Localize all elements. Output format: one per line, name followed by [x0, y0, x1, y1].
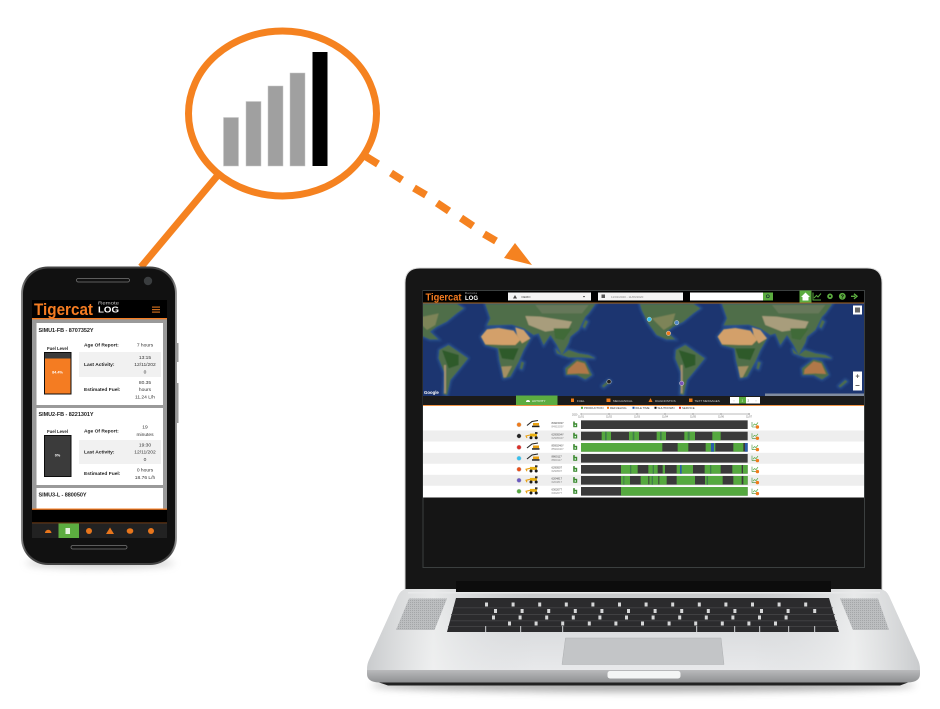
chart legend: PRODUCTION [584, 406, 603, 410]
world map [403, 303, 864, 396]
time axis: 11/04 [662, 416, 669, 418]
machine list [517, 420, 759, 495]
pagination: 2 [748, 398, 750, 402]
machine list: 6302077 [552, 491, 562, 495]
machine list: 6204817 [552, 477, 562, 481]
machine list: 6290504Y [552, 436, 564, 440]
world map: Google [424, 390, 439, 395]
laptop [367, 268, 920, 692]
row stripes [423, 430, 864, 486]
phone bottom speaker [71, 546, 127, 549]
card 2: 18.76 L/h [135, 475, 155, 481]
card 3: SIMU3-L - 880050Y [38, 492, 87, 498]
connector line from circle to phone [141, 175, 218, 267]
speaker grille left [396, 598, 447, 630]
pagination [730, 397, 760, 404]
search box [690, 292, 773, 300]
card 1: SIMU1-FB - 8707352Y [38, 328, 94, 334]
phone header: LOG [98, 304, 119, 314]
time axis: 11/07 [746, 416, 753, 418]
laptop screen: top bar: Tigercat [426, 292, 462, 304]
signal bars icon [224, 52, 328, 166]
dashed arrow from circle to laptop [365, 156, 532, 265]
phone header [34, 300, 160, 319]
laptop base [367, 581, 920, 686]
laptop front edge [367, 670, 920, 682]
keyboard [447, 598, 839, 632]
card 1: 11.24 L/h [135, 394, 155, 400]
navigation icons [800, 290, 857, 302]
map markers [607, 317, 684, 385]
phone [21, 266, 178, 568]
laptop screen: top bar: Remote [465, 292, 478, 295]
phone screen [32, 300, 167, 538]
timeline bars [581, 420, 748, 496]
trackpad [562, 638, 724, 664]
tab strip [423, 396, 864, 405]
phone speaker top [76, 278, 130, 282]
machine list: 6290507 [552, 466, 562, 470]
card 1: Fuel Level [47, 346, 68, 351]
pagination: 1 [742, 398, 744, 402]
phone header: Tigercat [34, 301, 93, 319]
machine list: 8860117 [552, 458, 562, 462]
chart legend [581, 406, 695, 410]
card 1: 7 hours [137, 342, 154, 348]
card 2: Age Of Report: [84, 428, 119, 434]
date range: 11/01/2020 - 11/06/2020 [611, 295, 644, 299]
card 2: 0% [55, 454, 61, 458]
card 2: Fuel Level [47, 429, 68, 434]
card 2: 0 [144, 457, 147, 463]
time axis: 2020 [572, 414, 578, 416]
tab strip: MECHANICAL [613, 399, 633, 403]
phone header: Remote [98, 300, 119, 306]
chart legend: REFUELING [610, 406, 627, 410]
machine list: 6290507 [552, 469, 562, 473]
tab strip: ACTIVITY [532, 399, 546, 403]
machine list: 8491503Y [552, 421, 564, 425]
card 1: Estimated Fuel: [84, 387, 121, 393]
hinge [456, 581, 831, 592]
card 2: minutes [136, 432, 154, 438]
card 1: 13:15 [139, 355, 151, 361]
card 2: 19 [142, 424, 148, 430]
card 1 [36, 323, 163, 405]
machine list: 6302077 [552, 488, 562, 492]
card 1: Age Of Report: [84, 342, 119, 348]
pagination: › [756, 398, 757, 402]
tab strip: FUEL [577, 399, 585, 403]
card 2: Estimated Fuel: [84, 471, 121, 477]
card 1: 80.35 [139, 380, 151, 386]
card 1: 0 [144, 370, 147, 376]
card 1: 84.4% [52, 370, 63, 374]
time axis [572, 413, 753, 418]
time axis: 11/01 [578, 416, 585, 418]
magnified signal circle [188, 31, 376, 196]
card 2 [36, 408, 163, 485]
date range [598, 292, 683, 300]
map controls: + [855, 374, 860, 380]
card 3 [36, 488, 163, 508]
machine list: 8590240Y [552, 444, 564, 448]
chart legend: SHUTDOWN [658, 406, 675, 410]
map controls [853, 306, 862, 390]
card 1: 12/11/202 [134, 362, 156, 368]
card 2: 12/11/202 [134, 450, 156, 456]
laptop screen: top bar: LOG [465, 296, 478, 302]
machine list: 8590240Y [552, 447, 564, 451]
card 2: Last Activity: [84, 450, 115, 456]
machine list: 6204817 [552, 480, 562, 484]
speaker grille right [840, 598, 889, 630]
time axis: 11/06 [718, 416, 725, 418]
tab strip: TEXT MESSAGES [694, 399, 720, 403]
machine list: 6290504Y [552, 432, 564, 436]
fleet dropdown [508, 292, 591, 300]
card 1: Last Activity: [84, 362, 115, 368]
phone camera [144, 277, 152, 285]
activity chart panel [423, 405, 864, 498]
machine list: 8860117 [552, 455, 562, 459]
card 1: hours [139, 387, 152, 393]
time axis: 11/03 [634, 416, 641, 418]
time axis: 11/05 [690, 416, 697, 418]
machine list: 8491503Y [552, 424, 564, 428]
time axis: 11/02 [606, 416, 613, 418]
card 2: 19:30 [139, 442, 151, 448]
fleet dropdown: DEMO [522, 295, 531, 299]
navigation icons: ? [841, 294, 845, 300]
laptop screen: top bar [423, 290, 864, 304]
chart legend: IDLE TIME [636, 406, 650, 410]
chart legend: SERVICE [682, 406, 695, 410]
phone bottom navigation [32, 522, 167, 538]
card 2: 0 hours [137, 468, 154, 474]
card 2: SIMU2-FB - 8221301Y [38, 412, 94, 418]
pagination: ‹ [734, 398, 735, 402]
tab strip: DIAGNOSTICS [655, 399, 676, 403]
laptop lid [405, 268, 882, 592]
